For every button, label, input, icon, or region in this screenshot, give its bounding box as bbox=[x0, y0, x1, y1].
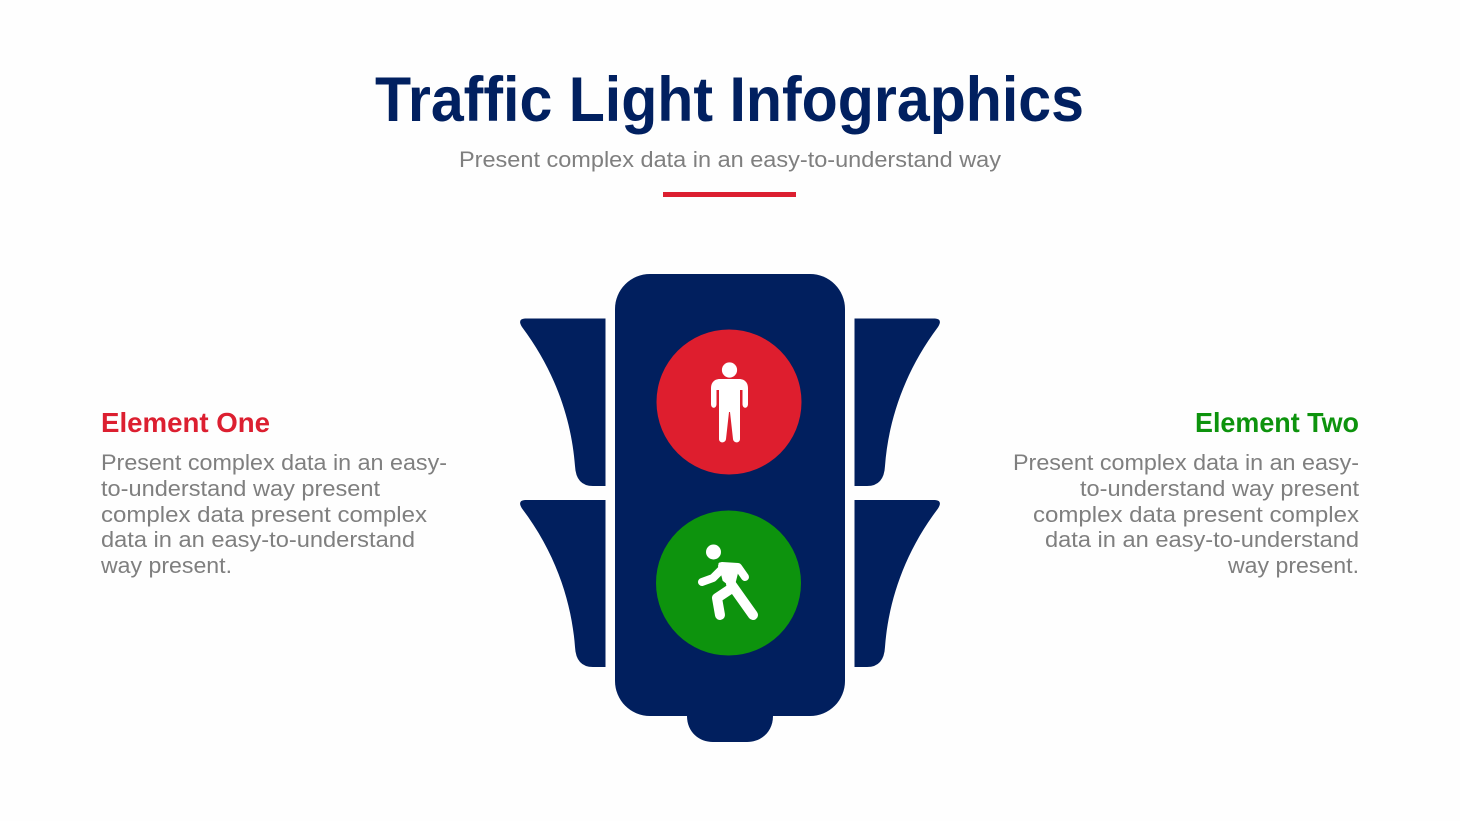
body text: element one: data in an easy-to-understand bbox=[101, 527, 415, 552]
panel: element one bbox=[100, 407, 447, 578]
title: Traffic Light Infographics bbox=[375, 65, 1084, 135]
body text: element two: way present. bbox=[1227, 553, 1359, 578]
right upper visor bbox=[854, 318, 940, 486]
body text: element one: Present complex data in an easy- bbox=[101, 450, 447, 475]
heading: element two: Element Two bbox=[1195, 407, 1359, 438]
body text: element two: to-understand way present bbox=[1080, 476, 1360, 501]
left lower visor bbox=[520, 500, 606, 667]
red light bbox=[656, 330, 802, 474]
green light bbox=[656, 510, 801, 656]
housing body bbox=[615, 274, 845, 716]
body text: element one: complex data present complex bbox=[101, 502, 428, 527]
icon: walking person bbox=[702, 544, 753, 615]
heading: element one: Element One bbox=[101, 407, 270, 438]
right lower visor bbox=[854, 500, 940, 667]
housing foot bbox=[687, 710, 773, 742]
body text: element two bbox=[1013, 450, 1360, 578]
body text: element one: way present. bbox=[100, 553, 232, 578]
body text: element two: data in an easy-to-understand bbox=[1045, 527, 1359, 552]
subtitle: Present complex data in an easy-to-understand way bbox=[459, 147, 1002, 172]
body text: element one bbox=[100, 450, 447, 578]
left upper visor bbox=[520, 318, 606, 486]
body text: element two: Present complex data in an easy- bbox=[1013, 450, 1359, 475]
body text: element two: complex data present complex bbox=[1033, 502, 1360, 527]
icon: standing person bbox=[711, 362, 748, 442]
traffic light bbox=[520, 274, 940, 742]
body text: element one: to-understand way present bbox=[101, 476, 381, 501]
title underline bbox=[663, 192, 796, 197]
panel: element two bbox=[1013, 407, 1360, 578]
